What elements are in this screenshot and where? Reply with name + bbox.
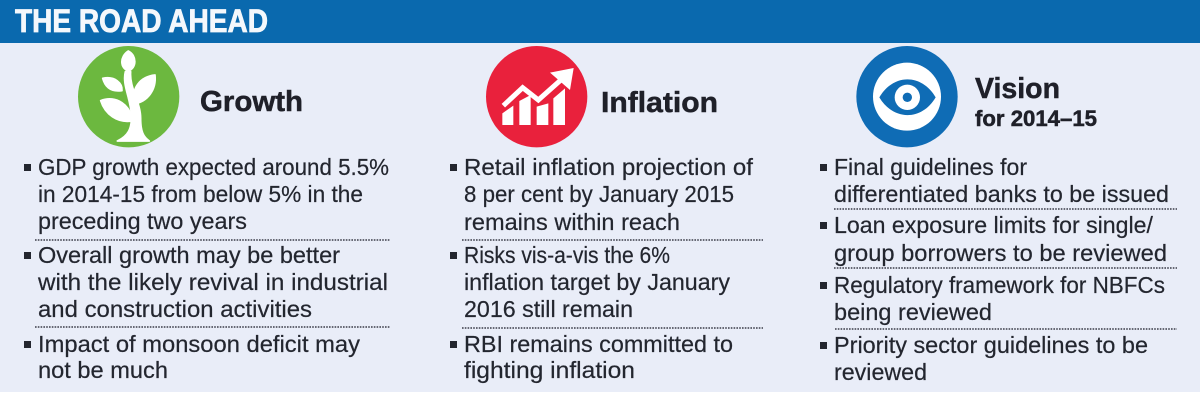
bullet: regulatory framework: Regulatory framework for NBFCs [834,272,1165,298]
bullet: GDP growth: GDP growth expected around 5.5% [38,154,389,180]
title banner [0,0,1200,43]
bullet: GDP growth: in 2014-15 from below 5% in the [38,181,363,207]
bullet: retail inflation: 8 per cent by January 2015 [464,181,734,207]
bullet: priority sector: reviewed [834,359,927,385]
bullet: final guidelines: Final guidelines for [834,154,1027,180]
bullet: final guidelines: differentiated banks to be issued [834,181,1169,207]
subheading: for 2014-15: for 2014–15 [975,106,1097,131]
bullet: priority sector: Priority sector guidelines to be [834,332,1148,358]
panel: vision [820,46,1177,385]
bullet: retail inflation [450,154,754,235]
title banner: THE ROAD AHEAD [15,3,268,39]
bullet: monsoon [24,331,361,383]
bullet: risks: 2016 still remain [464,296,633,322]
bullet: loan exposure [820,212,1167,266]
bullet: loan exposure: group borrowers to be reviewed [834,240,1167,266]
bullet: overall growth: Overall growth may be better [38,242,340,268]
bullet: final guidelines [820,154,1169,207]
icon: blue eye [856,46,958,147]
bullet: loan exposure: Loan exposure limits for single/ [834,212,1154,238]
bullet: retail inflation: remains within reach [464,209,680,235]
bullet: RBI committed: fighting inflation [464,357,635,383]
bullet: risks: Risks vis-a-vis the 6% [464,242,670,268]
heading: inflation: Inflation [601,87,718,119]
bullet: RBI committed: RBI remains committed to [464,331,733,357]
bullet: overall growth: with the likely revival in industrial [37,269,388,295]
bullet: risks: inflation target by January [464,269,730,295]
bullet: overall growth: and construction activities [38,296,312,322]
bullet: RBI committed [450,331,733,383]
bullet: monsoon: not be much [38,357,168,383]
bullet: regulatory framework [820,272,1165,325]
heading: vision: Vision [975,73,1060,105]
panel: inflation [450,46,763,383]
icon: green plant [78,46,179,147]
bullet: risks [450,242,730,322]
bullet: overall growth [24,242,388,322]
bullet: monsoon: Impact of monsoon deficit may [38,331,361,357]
bullet: regulatory framework: being reviewed [834,299,992,325]
bullet: GDP growth: preceding two years [38,208,247,234]
heading: growth: Growth [200,86,303,118]
bullet: priority sector [820,332,1148,385]
panel: growth [24,46,390,383]
icon: red rising chart [486,46,587,147]
bullet: GDP growth [24,154,389,234]
bullet: retail inflation: Retail inflation projection of [464,154,754,180]
